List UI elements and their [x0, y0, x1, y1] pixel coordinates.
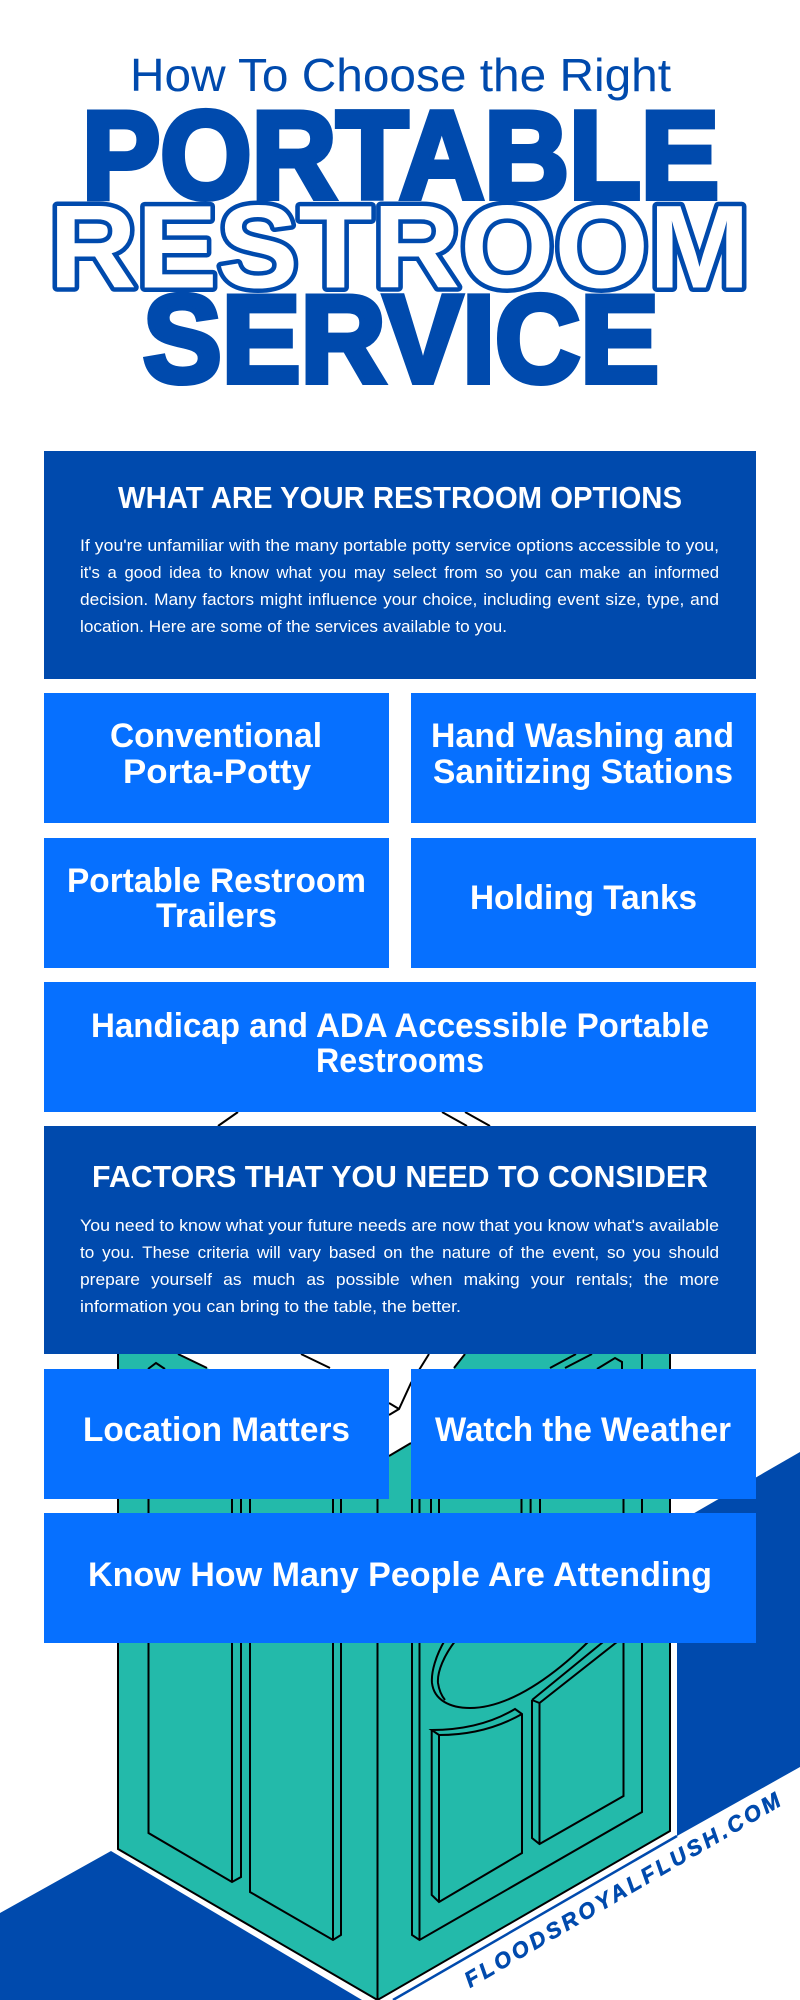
panel: what are your restroom options: [44, 451, 756, 679]
body text: information you can bring to the table, the better.: [80, 1298, 461, 1316]
option: conventional porta-potty: [44, 693, 389, 823]
background shape: right blue diagonal band: [677, 1452, 800, 1836]
left door panels: [148, 1495, 341, 1940]
body text: prepare yourself as much as possible when making your rentals; the more: [80, 1271, 719, 1289]
factor: watch the weather: Watch the Weather: [435, 1411, 731, 1449]
option: portable restroom trailers: Trailers: [156, 897, 277, 935]
body text: You need to know what your future needs are now that you know what's available: [80, 1217, 719, 1235]
door oval window: [432, 1640, 590, 1708]
subtitle line: How To Choose the Right: [130, 49, 671, 101]
lower right door panel: [532, 1495, 624, 1844]
heading: FACTORS THAT YOU NEED TO CONSIDER: [92, 1159, 708, 1194]
title word PORTABLE: PORTABLE: [82, 87, 719, 225]
restroom body: [118, 1340, 670, 2000]
body text: [80, 537, 719, 636]
body text: location. Here are some of the services available to you.: [80, 618, 507, 636]
vertical panel edges: [431, 1495, 540, 1516]
option: portable restroom trailers: [44, 838, 389, 968]
footer website text: FLOODSROYALFLUSH.COM: [460, 1787, 785, 1992]
option: conventional porta-potty: Conventional: [110, 717, 322, 755]
option: portable restroom trailers: Portable Restroom: [67, 862, 366, 900]
corner line: [376, 1495, 378, 2000]
option: handicap and ada accessible portable restrooms: Restrooms: [316, 1042, 484, 1080]
option: conventional porta-potty: Porta-Potty: [123, 753, 311, 791]
panel: factors that you need to consider: [44, 1126, 756, 1354]
body text: it's a good idea to know what you may select from so you can make an informed: [80, 564, 719, 582]
right door frame: [412, 1354, 642, 1940]
illustration: portable restroom: [118, 1112, 670, 2000]
lower left door panel: [432, 1709, 522, 1902]
factor: know how many people are attending: Know How Many People Are Attending: [88, 1556, 712, 1594]
footer rule: [393, 1836, 677, 2000]
body text: [80, 1217, 719, 1316]
option: hand washing and sanitizing stations: Hand Washing and: [431, 717, 734, 755]
option: hand washing and sanitizing stations: [411, 693, 756, 823]
factor: location matters: Location Matters: [83, 1411, 350, 1449]
body text: decision. Many factors might influence your choice, including event size, type, and: [80, 591, 719, 609]
factor: know how many people are attending: [44, 1513, 756, 1643]
factor: location matters: [44, 1369, 389, 1499]
body text: If you're unfamiliar with the many portable potty service options accessible to you,: [80, 537, 719, 555]
option: handicap and ada accessible portable restrooms: Handicap and ADA Accessible Portable: [91, 1007, 709, 1045]
title: [49, 49, 750, 409]
background shape: lower-left blue diagonal: [0, 1851, 362, 2000]
option: hand washing and sanitizing stations: Sanitizing Stations: [433, 753, 733, 791]
option: handicap and ada accessible portable restrooms: [44, 982, 756, 1112]
title word SERVICE: SERVICE: [143, 271, 659, 409]
title word RESTROOM: RESTROOM: [49, 182, 750, 314]
roof edge lines: [148, 1112, 622, 1456]
body text: to you. These criteria will vary based on the nature of the event, so you should: [80, 1244, 719, 1262]
option: holding tanks: [411, 838, 756, 968]
heading: WHAT ARE YOUR RESTROOM OPTIONS: [118, 480, 682, 515]
restroom roof: [178, 1340, 465, 1456]
factor: watch the weather: [411, 1369, 756, 1499]
option: holding tanks: Holding Tanks: [470, 879, 697, 917]
